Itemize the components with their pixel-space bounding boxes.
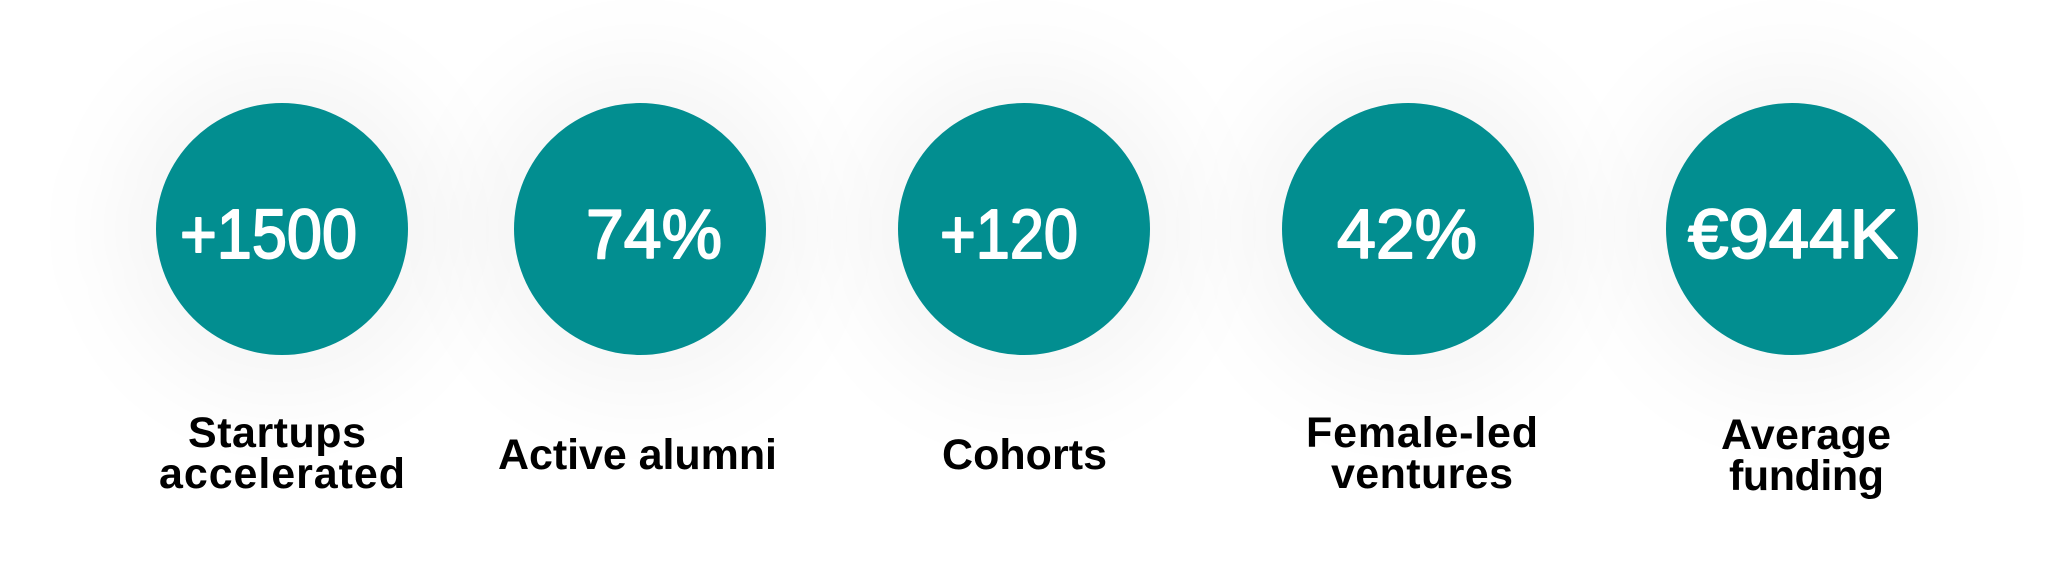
label: startups accelerated: accelerated [159, 450, 405, 498]
value: €944K: €944K [1688, 195, 1898, 273]
circle badge: startups accelerated [156, 103, 408, 355]
label: female-led ventures: Female-led [1306, 409, 1538, 457]
stat: female-led ventures [1238, 59, 1578, 498]
stat: active alumni [470, 59, 810, 479]
label: active alumni: Active alumni [498, 431, 777, 479]
circle badge: active alumni [514, 103, 766, 355]
label: average funding: funding [1729, 452, 1884, 500]
stat: cohorts [854, 59, 1194, 479]
label: cohorts: Cohorts [942, 431, 1107, 479]
value: 74%: 74% [586, 195, 722, 273]
value: +120: +120 [940, 195, 1078, 273]
stat: startups accelerated [112, 59, 452, 498]
value: 42%: 42% [1337, 195, 1477, 273]
circle badge: average funding [1666, 103, 1918, 355]
label: startups accelerated: Startups [188, 409, 366, 457]
circle badge: female-led ventures [1282, 103, 1534, 355]
value: +1500: +1500 [180, 195, 357, 273]
label: female-led ventures: ventures [1331, 450, 1513, 498]
label: average funding: Average [1721, 411, 1891, 459]
circle badge: cohorts [898, 103, 1150, 355]
stat: average funding [1622, 59, 1962, 500]
